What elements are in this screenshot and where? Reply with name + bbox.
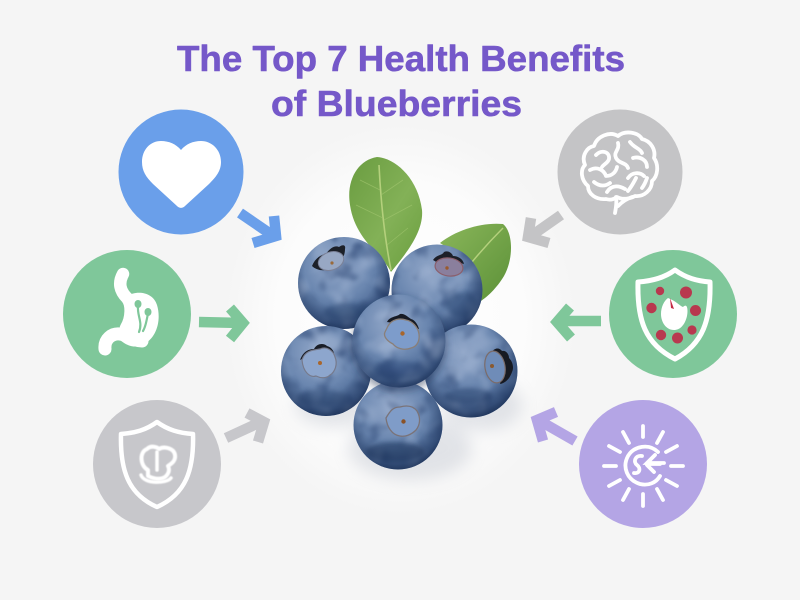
arrow: gut to berries (199, 308, 243, 339)
center berry contact shadow (352, 298, 446, 392)
title (177, 38, 625, 124)
background glow behind berries (225, 125, 575, 515)
cast shadow (295, 379, 522, 480)
berry: right (424, 323, 519, 419)
icon: sun skin circle (579, 400, 707, 528)
arrow: heart to berries (240, 213, 276, 243)
title: The Top 7 Health Benefits (177, 38, 625, 79)
icon: heart health circle (118, 110, 244, 234)
arrow: shield to berries (226, 413, 264, 442)
icon: immune shield gray circle (93, 400, 221, 528)
icon: antioxidant shield circle (609, 250, 737, 378)
arrow: antioxidant to berries (557, 307, 601, 338)
arrow: skin to berries (537, 412, 575, 441)
berry: left (280, 325, 372, 417)
berry: bottom (352, 380, 444, 470)
berry: center (352, 293, 447, 389)
icon: brain circle (558, 110, 682, 234)
leaf: right (440, 224, 511, 301)
leaf: upper left (349, 157, 422, 272)
icon: gut health circle (63, 250, 191, 378)
berry: top right (390, 243, 484, 337)
berry: top left (296, 235, 392, 331)
title: of Blueberries (271, 83, 522, 124)
free radical dots (646, 286, 701, 344)
arrow: brain to berries (528, 215, 561, 243)
blueberry cluster (280, 157, 522, 480)
